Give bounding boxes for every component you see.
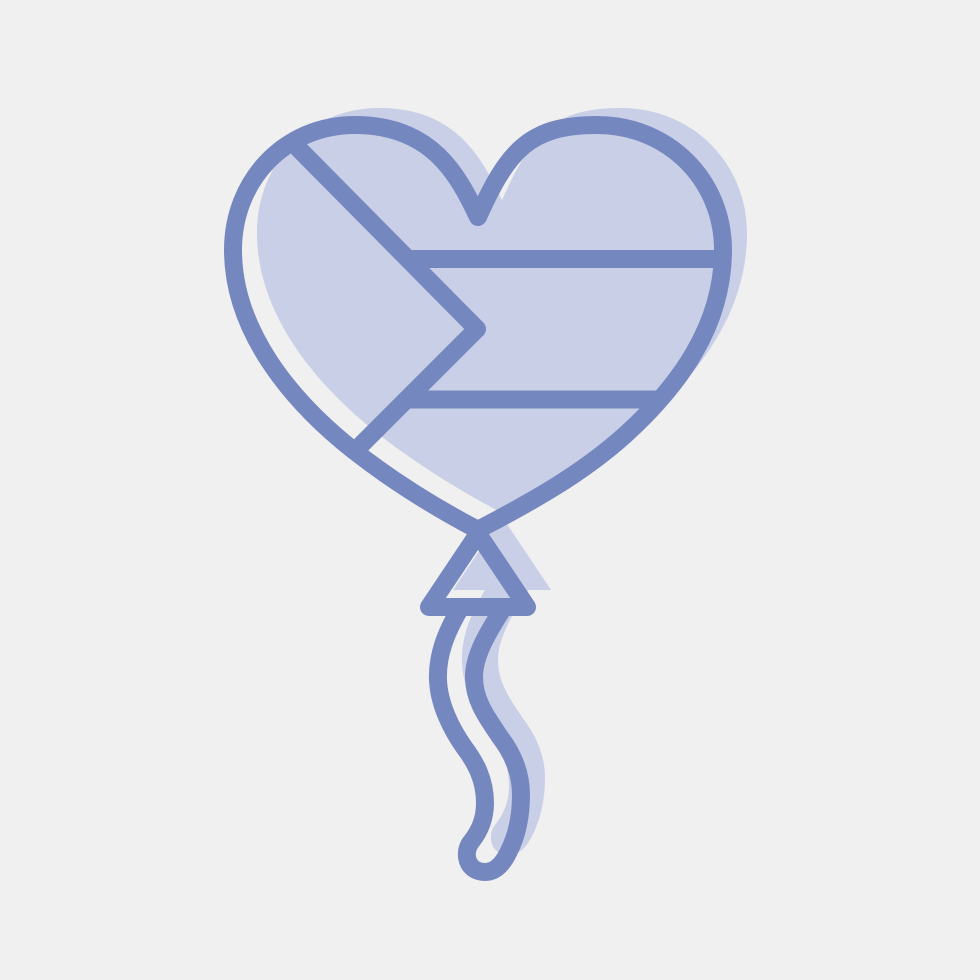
balloon knot xyxy=(429,534,527,607)
heart outline xyxy=(233,125,723,530)
balloon ribbon xyxy=(438,607,521,872)
offset shadow fill xyxy=(257,108,747,855)
flag chevron and stripes xyxy=(293,143,722,451)
